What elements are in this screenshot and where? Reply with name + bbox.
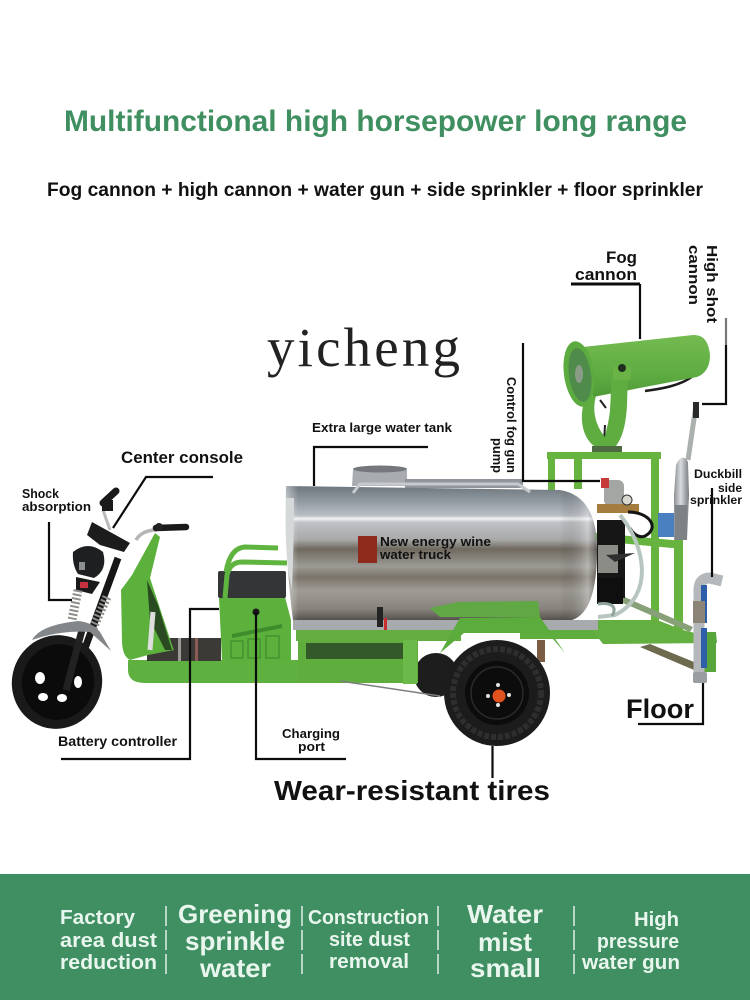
text: water mist small: Water bbox=[467, 899, 543, 929]
text: construction site dust removal: site dust bbox=[329, 929, 410, 951]
blue box bbox=[658, 513, 677, 537]
callout: floor sprinkler bbox=[626, 683, 703, 724]
callout: fog cannon: cannon bbox=[575, 265, 637, 284]
text: high pressure water gun: High bbox=[634, 909, 679, 931]
text: greening sprinkle water: water bbox=[199, 953, 271, 983]
callout: center console bbox=[113, 448, 243, 528]
watermark: yicheng bbox=[267, 317, 460, 378]
callout: battery controller bbox=[58, 609, 219, 759]
title: Multifunctional high horsepower long range bbox=[64, 105, 687, 138]
callout: duckbill side sprinkler bbox=[690, 469, 743, 577]
callout: wear-resistant tires: Wear-resistant tires bbox=[274, 775, 550, 806]
logo badge bbox=[358, 536, 377, 563]
charging socket bbox=[252, 608, 260, 616]
duckbill side sprinkler pipe bbox=[693, 578, 722, 683]
rear deck bbox=[520, 595, 717, 672]
callout: extra large water tank: Extra large water tank bbox=[312, 420, 453, 435]
label: new energy wine water truck bbox=[379, 535, 491, 562]
label: new energy wine water truck: New energy wine bbox=[380, 535, 491, 549]
callout: duckbill side sprinkler: side bbox=[718, 483, 742, 495]
callout: duckbill side sprinkler: sprinkler bbox=[690, 495, 743, 507]
callout: control fog gun pump: Control fog gun bbox=[504, 377, 518, 473]
high shot gun bbox=[674, 402, 699, 540]
label: new energy wine water truck: water truck bbox=[379, 548, 451, 562]
text: construction site dust removal: removal bbox=[329, 951, 409, 973]
callout: fog cannon bbox=[571, 248, 640, 339]
callout: shock absorption bbox=[22, 487, 91, 600]
panel: application banner bbox=[0, 874, 750, 1000]
callout: high shot cannon: cannon bbox=[685, 245, 702, 305]
text: high pressure water gun bbox=[581, 909, 680, 974]
chassis frame bbox=[296, 617, 565, 696]
text: factory area dust reduction bbox=[60, 907, 157, 974]
icon: front wheel bbox=[0, 621, 114, 741]
rear upper frame bbox=[547, 452, 683, 632]
subtitle: Fog cannon + high cannon + water gun + side sprinkler + floor sprinkler bbox=[47, 180, 704, 201]
text: factory area dust reduction: area dust bbox=[60, 930, 157, 952]
callout: charging port bbox=[256, 612, 346, 759]
text: high pressure water gun: pressure bbox=[597, 931, 679, 953]
text: greening sprinkle water: sprinkle bbox=[185, 926, 285, 956]
text: water mist small: small bbox=[470, 953, 541, 983]
text: greening sprinkle water bbox=[178, 899, 292, 983]
icon: rear wheel bbox=[444, 640, 550, 746]
text: greening sprinkle water: Greening bbox=[178, 899, 292, 929]
callout: floor sprinkler: Floor bbox=[626, 694, 694, 724]
front leg shield bbox=[121, 533, 174, 660]
water tank bbox=[286, 466, 598, 630]
callout: duckbill side sprinkler: Duckbill bbox=[694, 469, 742, 481]
handlebar and console bbox=[73, 491, 186, 594]
callout: shock absorption: Shock bbox=[22, 487, 59, 501]
callout: control fog gun pump bbox=[490, 343, 600, 481]
text: high pressure water gun: water gun bbox=[581, 952, 680, 974]
text: factory area dust reduction: reduction bbox=[60, 952, 157, 974]
text: water mist small: mist bbox=[478, 927, 532, 957]
text: water mist small bbox=[467, 899, 543, 983]
pump assembly bbox=[597, 478, 652, 617]
callout: control fog gun pump: pump bbox=[490, 438, 504, 473]
callout: charging port: port bbox=[298, 739, 326, 754]
callout: shock absorption: absorption bbox=[22, 500, 91, 514]
text: factory area dust reduction: Factory bbox=[60, 907, 136, 929]
callout: fog cannon: Fog bbox=[606, 248, 637, 267]
front forks and springs bbox=[69, 558, 118, 692]
callout: charging port: Charging bbox=[282, 726, 340, 741]
icon: far rear wheel bbox=[414, 653, 458, 697]
text: construction site dust removal bbox=[308, 907, 429, 973]
front floor bbox=[128, 638, 298, 683]
callout: battery controller: Battery controller bbox=[58, 733, 178, 749]
text: construction site dust removal: Construction bbox=[308, 907, 429, 929]
callout: high shot cannon: High shot bbox=[703, 245, 720, 323]
callout: center console: Center console bbox=[121, 448, 243, 467]
callout: extra large water tank bbox=[312, 420, 453, 486]
seat box bbox=[218, 547, 291, 660]
callout: high shot cannon bbox=[685, 245, 726, 404]
vehicle illustration bbox=[0, 335, 722, 746]
fog cannon bbox=[560, 335, 710, 452]
